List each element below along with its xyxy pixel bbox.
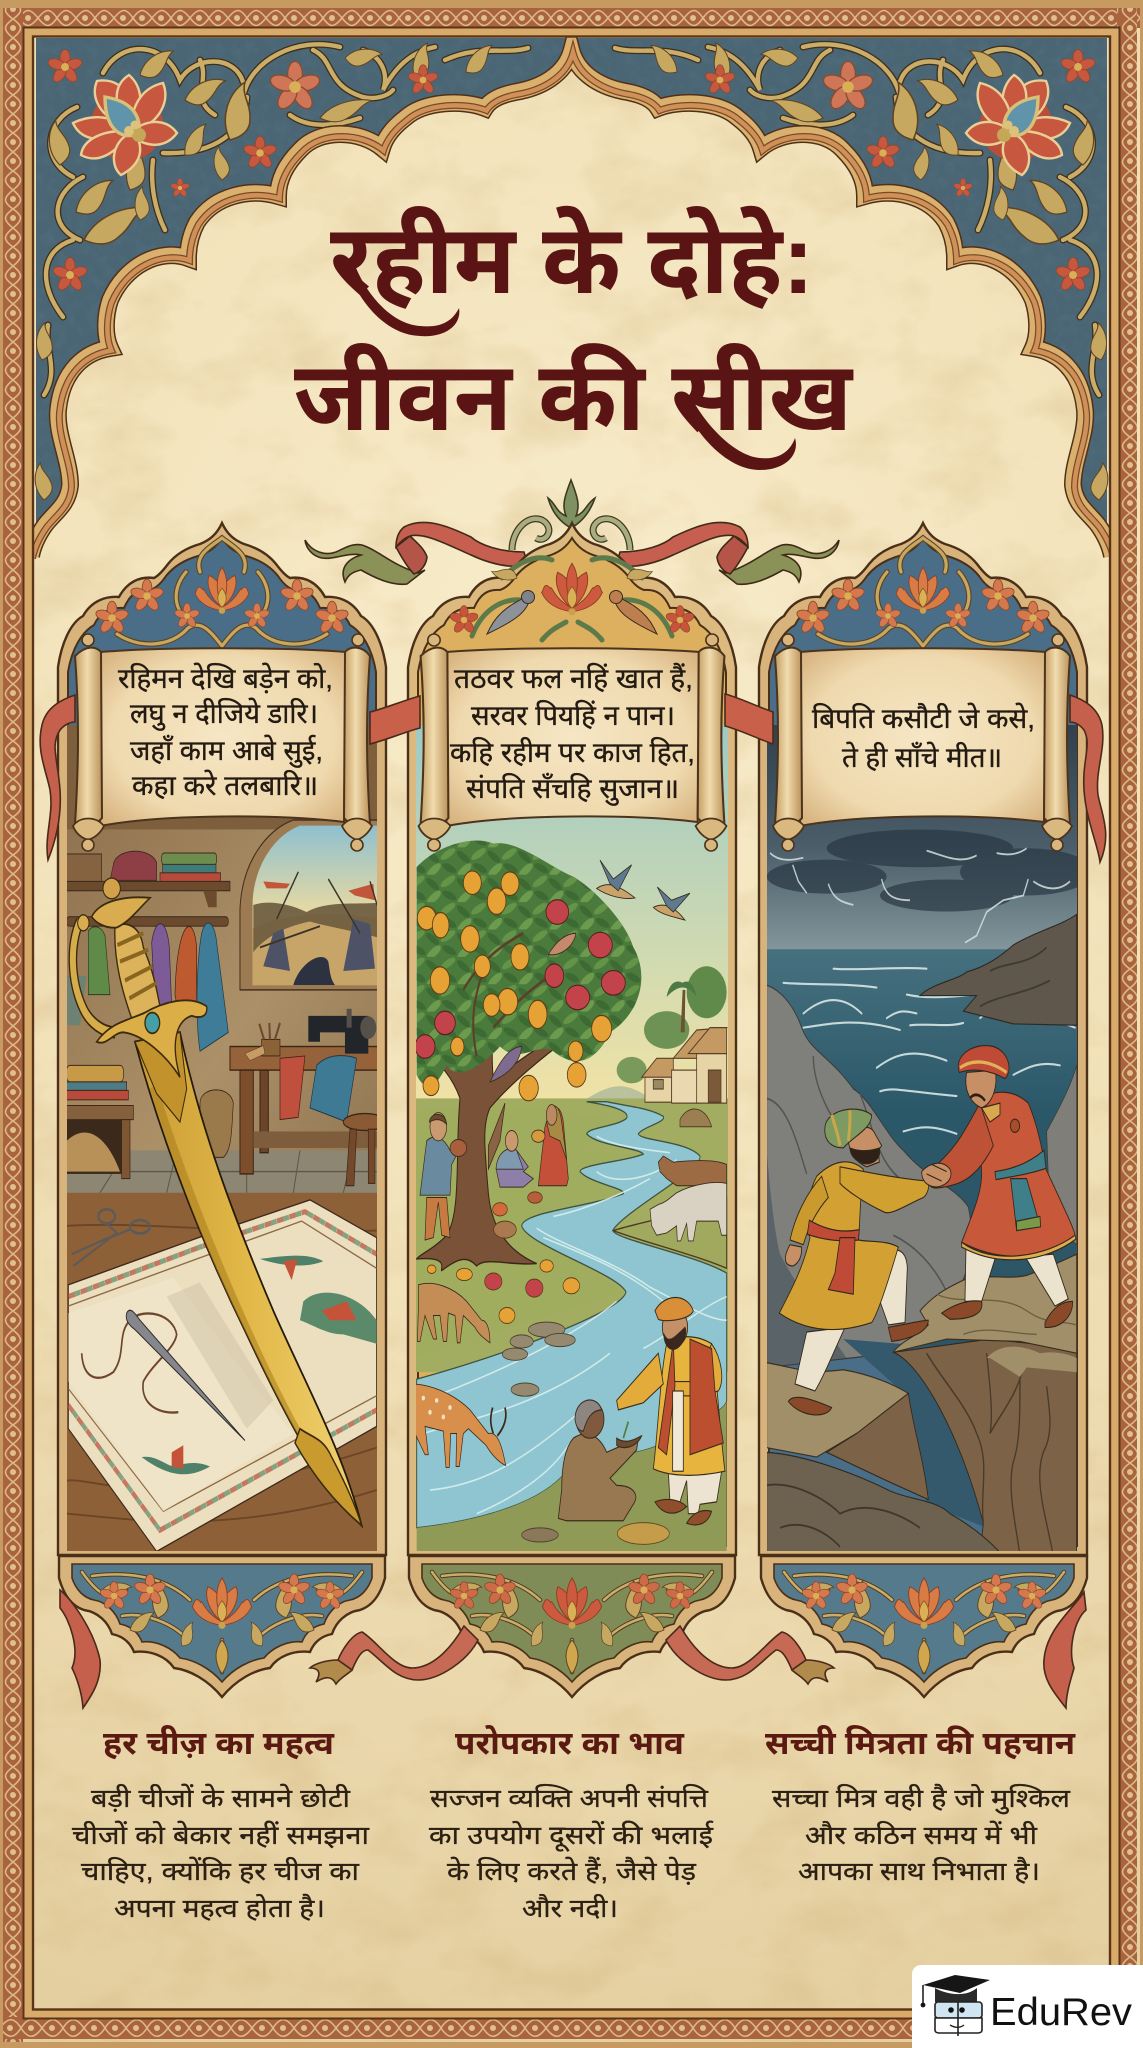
sword hilt — [73, 921, 115, 1032]
lower side leaves — [30, 322, 1113, 501]
coins — [617, 1523, 669, 1544]
right friend legs and shoes — [942, 1247, 1073, 1327]
column 2 description: का उपयोग दूसरों की भलाई — [429, 1820, 714, 1852]
scissors — [72, 1209, 150, 1266]
illustration: storm, sea, cliff, two friends — [760, 716, 1093, 1556]
top centre crown ornament — [512, 480, 630, 550]
column 2 description: सज्जन व्यक्ति अपनी संपत्ति — [430, 1783, 709, 1813]
woman in sari — [532, 1105, 568, 1186]
panel 2 verse: संपति सँचहि सुजान॥ — [466, 772, 679, 806]
title flourish line 1 — [348, 268, 459, 336]
chasm — [843, 1339, 987, 1528]
panel 2 verse — [450, 662, 695, 806]
column 1 text — [72, 1725, 370, 1923]
grazing deer — [417, 1283, 490, 1343]
right ledge and cliff face — [893, 1339, 1077, 1556]
panel 3 top arabesque — [796, 538, 1050, 646]
EduRev logo — [912, 1965, 1143, 2048]
frame pattern left — [3, 8, 23, 2042]
kneeling man — [558, 1400, 642, 1521]
panel 3 scroll — [773, 634, 1072, 851]
lower ribbons — [60, 1590, 1086, 1708]
panel 3 bottom shield — [761, 1556, 1087, 1697]
near bank — [417, 1400, 727, 1556]
wood table — [67, 1193, 380, 1556]
panel 2 verse: कहि रहीम पर काज हित, — [450, 736, 695, 768]
panel 2 bottom shield — [409, 1556, 735, 1697]
column 3 description: आपका साथ निभाता है। — [798, 1856, 1040, 1886]
shelf and folded cloths — [67, 881, 230, 891]
title line 2: जीवन की सीख — [294, 342, 854, 451]
panel 1 verse: लघु न दीजिये डारि। — [130, 697, 318, 731]
storm sky — [760, 716, 1090, 952]
panel 1 verse: जहाँ काम आबे सुई, — [130, 734, 323, 768]
column 2 description — [429, 1783, 714, 1923]
sword blade — [135, 1032, 362, 1525]
red fruits — [415, 900, 625, 1058]
panel 2: fruit tree and river — [408, 523, 740, 1697]
tree crown — [417, 841, 641, 1086]
column 2 description: के लिए करते हैं, जैसे पेड़ — [447, 1856, 697, 1886]
right friend robe — [926, 1092, 1076, 1260]
column 1 heading: हर चीज़ का महत्व — [103, 1725, 335, 1761]
panel 3 arch frame — [759, 523, 1087, 1555]
column 2 heading: परोपकार का भाव — [455, 1725, 685, 1761]
panel 1 arch frame — [58, 523, 386, 1555]
lower centre ribbon left — [338, 1626, 478, 1680]
ribbon panel 2 to 3 — [725, 694, 773, 744]
panel 3 verse: बिपति कसौटी जे कसे, — [812, 702, 1035, 734]
distant trees — [687, 966, 727, 1018]
panel 2 scroll — [419, 634, 726, 851]
panel 1 verse: रहिमन देखि बड़ेन को, — [118, 662, 333, 694]
panel 1 scroll — [73, 634, 372, 851]
lower ribbon right — [1044, 1592, 1086, 1708]
stool — [342, 1112, 377, 1132]
left ledge — [767, 1363, 908, 1457]
drinking deer — [410, 1384, 506, 1467]
needle and thread — [82, 1313, 178, 1413]
ribbon right of panel 3 — [1070, 695, 1106, 862]
hanging cloths — [88, 927, 110, 995]
ribbon left of panel 1 — [40, 695, 75, 860]
sea — [760, 949, 1090, 1355]
frame pattern top — [3, 8, 1140, 28]
panel 2 arch frame — [408, 523, 736, 1555]
panel 1: tailor shop and sword — [58, 523, 390, 1697]
column 3 heading: सच्ची मित्रता की पहचान — [765, 1725, 1076, 1761]
floral motifs on cloth — [142, 1256, 377, 1474]
column 2 description: और नदी। — [522, 1893, 618, 1923]
left friend head — [825, 1109, 882, 1167]
visible branches — [463, 933, 550, 1056]
column 1 description: चाहिए, क्योंकि हर चीज का — [81, 1856, 360, 1886]
panel 1 bottom shield — [59, 1556, 385, 1697]
lower centre ribbon tail left — [310, 1660, 352, 1684]
title — [294, 205, 854, 470]
left grey cliff — [767, 985, 971, 1367]
icon: graduation cap and face — [921, 1975, 990, 2036]
cloth stack and box — [67, 1065, 123, 1082]
man at tree — [420, 1113, 467, 1240]
distant right headland — [920, 914, 1077, 1025]
column 3 text — [765, 1725, 1076, 1886]
title flourish line 2 — [680, 395, 796, 470]
arch gold band — [31, 50, 1114, 558]
village houses — [642, 1028, 727, 1103]
left friend robe — [779, 1162, 929, 1330]
bottom left rocks — [767, 1452, 1003, 1556]
standing man in robe — [617, 1297, 725, 1525]
panel 1 verse: कहा करे तलबारि॥ — [132, 769, 318, 801]
left friend legs and shoes — [788, 1250, 928, 1415]
mangoes — [417, 871, 612, 1101]
right friend head — [958, 1046, 1009, 1122]
tree trunk and branches — [417, 980, 570, 1271]
sewing table and machine — [230, 1047, 380, 1070]
top ribbon left — [305, 522, 528, 584]
birds — [490, 860, 690, 1082]
frame pattern right — [1117, 8, 1137, 2042]
lower centre ribbon tail right — [792, 1660, 834, 1684]
panel 1 top arabesque — [95, 538, 349, 646]
right spandrel ornaments — [615, 41, 1099, 395]
column 1 description — [72, 1783, 370, 1923]
side ribbons between panels — [40, 694, 1106, 862]
fallen fruit — [427, 1192, 580, 1324]
right grey rock — [1047, 1065, 1077, 1245]
panel 2 top ornament with birds — [449, 558, 695, 640]
cattle — [650, 1156, 727, 1241]
column 1 description: अपना महत्व होता है। — [114, 1893, 325, 1923]
panel 2 verse: तठवर फल नहिं खात हैं, — [454, 662, 693, 694]
ribbon panel 1 to 2 — [370, 696, 420, 744]
illustration: tree, river, people — [410, 716, 740, 1556]
river — [417, 1102, 727, 1528]
column 3 description: सच्चा मित्र वही है जो मुश्किल — [772, 1783, 1070, 1814]
top ribbon right — [616, 522, 839, 584]
illustration: tailor shop, sword, needle — [60, 716, 390, 1556]
embroidered cloth — [68, 1200, 377, 1551]
stones — [502, 1322, 575, 1542]
window showing battle — [240, 820, 380, 990]
column 1 description: बड़ी चीजों के सामने छोटी — [91, 1783, 351, 1813]
distant hills and fields — [587, 1086, 644, 1098]
column 2 text — [429, 1725, 714, 1923]
lower ribbon left — [60, 1590, 100, 1708]
panel 3: friends on the cliff in a storm — [759, 523, 1093, 1697]
clasped hands — [922, 1163, 951, 1187]
column 1 description: चीजों को बेकार नहीं समझना — [72, 1820, 370, 1850]
panel 3 verse — [812, 702, 1035, 773]
column 3 description — [772, 1783, 1070, 1886]
column 3 description: और कठिन समय में भी — [805, 1820, 1038, 1850]
panel 3 verse: ते ही साँचे मीत॥ — [842, 741, 1002, 773]
lower centre ribbon right — [666, 1626, 806, 1680]
panel 2 verse: सरवर पियहिं न पान। — [471, 699, 675, 731]
title line 1: रहीम के दोहे: — [330, 205, 814, 314]
wordmark: EduRev — [990, 1991, 1133, 2034]
frame pattern bottom — [3, 2017, 1140, 2039]
left spandrel ornaments — [44, 41, 528, 395]
basket — [200, 1090, 233, 1157]
panel 1 verse — [118, 662, 333, 801]
squatting person — [496, 1131, 533, 1187]
top ribbons — [305, 522, 839, 584]
